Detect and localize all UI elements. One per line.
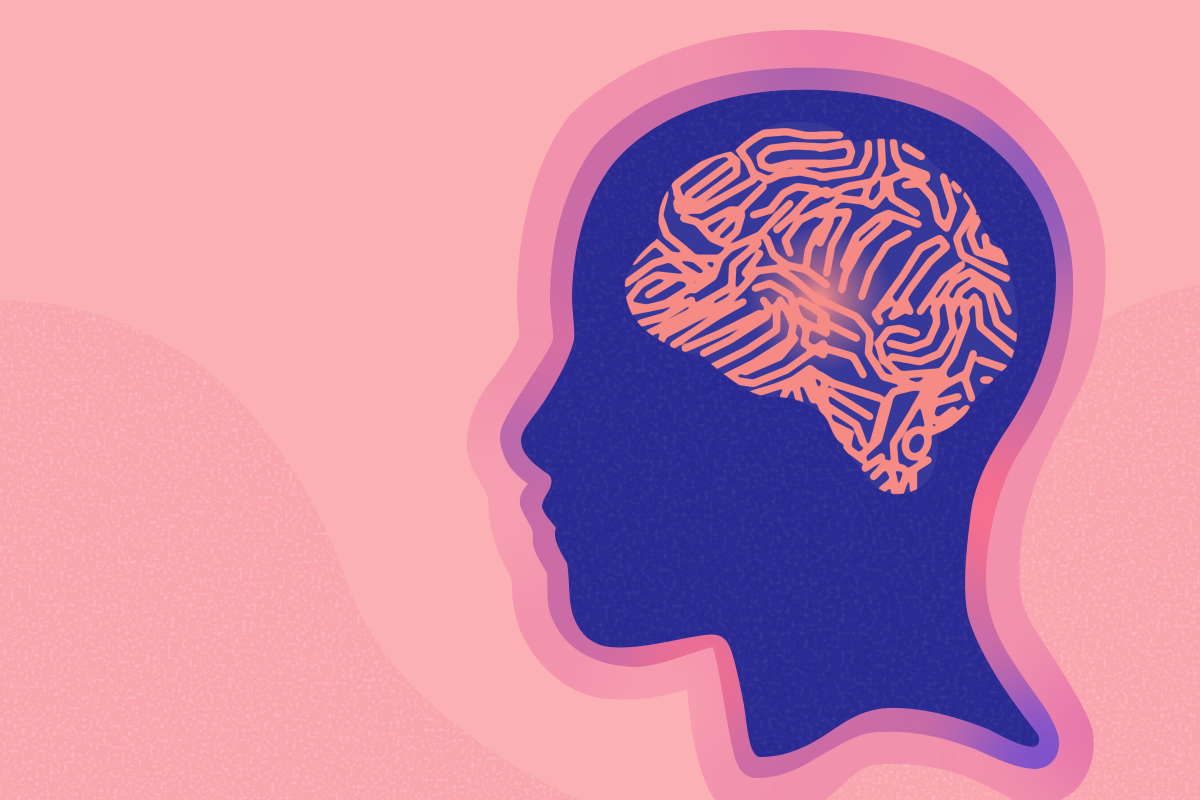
left textured blob [0, 290, 590, 800]
brain centre glow [750, 230, 888, 368]
brain lines: upper left [626, 132, 827, 312]
brain lines: lower right [820, 300, 1017, 493]
brain lines: lower left [630, 300, 827, 410]
brain with maze pattern [625, 122, 1017, 494]
outer head halo [467, 30, 1106, 800]
brain lines: upper right [820, 135, 1008, 312]
right textured blob [826, 285, 1200, 800]
head silhouette [510, 85, 1070, 757]
middle head band with pink-purple gradient [500, 68, 1074, 778]
